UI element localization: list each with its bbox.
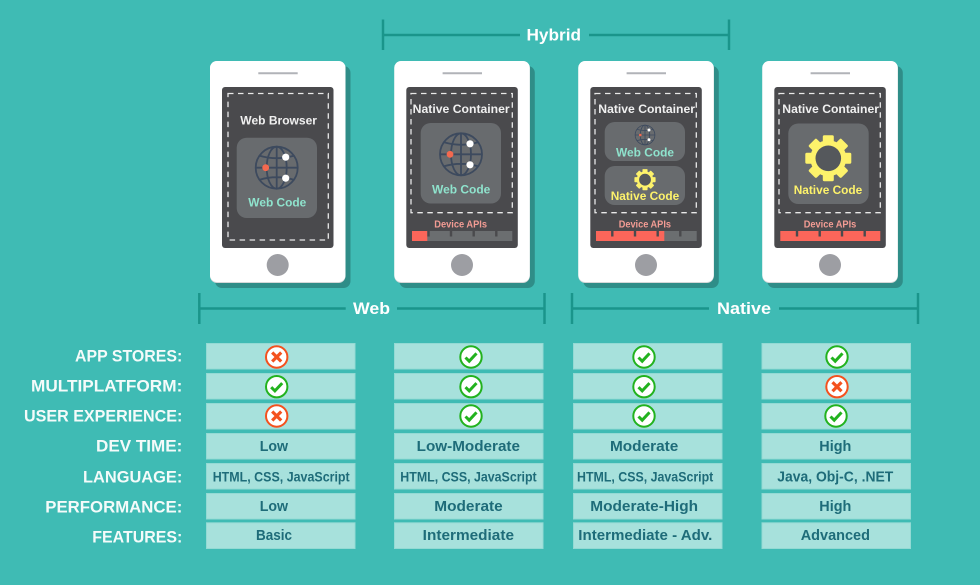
web code label: Web Code: [432, 182, 491, 196]
row: app stores: APP STORES:: [75, 347, 182, 366]
icon: gear: [805, 135, 851, 181]
row: language: Java, Obj-C, .NET: [777, 468, 893, 486]
row: dev time: [96, 434, 910, 459]
device APIs label: Device APIs: [434, 218, 487, 230]
device APIs label: Device APIs: [619, 218, 671, 230]
web code card: [605, 122, 685, 161]
dashed container: [411, 94, 512, 213]
icon: globe: [256, 147, 298, 189]
bracket: Native: Native: [717, 299, 771, 318]
row: performance: Moderate-High: [590, 498, 698, 515]
row: dev time: High: [819, 438, 851, 455]
row: user experience: USER EXPERIENCE:: [24, 407, 182, 426]
bracket: Web: [199, 293, 545, 324]
phone: Hybrid web code: [394, 61, 535, 288]
web code label: Web Code: [248, 196, 307, 210]
row: dev time: DEV TIME:: [96, 437, 182, 456]
dashed container: [595, 94, 696, 213]
row: performance: PERFORMANCE:: [45, 498, 182, 517]
phone: Hybrid web and native code: [578, 61, 719, 288]
row: performance: [45, 494, 911, 519]
row: language: HTML, CSS, JavaScript: [577, 470, 714, 484]
row: dev time: Moderate: [610, 438, 678, 455]
bracket: Hybrid: [383, 20, 729, 50]
row: app stores: [75, 344, 910, 369]
row: multiplatform: MULTIPLATFORM:: [31, 377, 182, 396]
row: language: HTML, CSS, JavaScript: [213, 470, 350, 484]
web code card: [421, 123, 501, 204]
row: features: Intermediate - Adv.: [578, 527, 712, 544]
container label: Native Container: [413, 102, 510, 116]
native code label: Native Code: [611, 189, 680, 203]
device API bar: [596, 231, 697, 241]
row: features: Basic: [256, 527, 292, 544]
row: performance: Moderate: [434, 498, 503, 515]
row: multiplatform: [31, 374, 910, 399]
icon: globe: [440, 133, 482, 175]
row: language: LANGUAGE:: [83, 468, 182, 487]
row: language: HTML, CSS, JavaScript: [400, 470, 537, 484]
phone: Web Browser: [210, 61, 350, 288]
container label: Web Browser: [240, 114, 317, 128]
device API bar: [412, 231, 512, 241]
bracket: Hybrid: Hybrid: [526, 26, 581, 44]
phone: Native: [762, 61, 903, 288]
bracket: Native: [572, 293, 918, 324]
bracket: Web: Web: [353, 299, 390, 318]
icon: small gear: [634, 169, 656, 190]
row: features: Advanced: [801, 527, 870, 544]
row: features: [92, 523, 911, 548]
icon: small globe: [635, 125, 655, 145]
row: features: FEATURES:: [92, 528, 182, 547]
container label: Native Container: [782, 102, 879, 116]
device API bar: [780, 231, 880, 241]
dashed container: [228, 94, 328, 240]
row: performance: High: [819, 498, 851, 515]
container label: Native Container: [598, 102, 695, 116]
row: language: [83, 464, 910, 489]
native code card: [788, 124, 869, 204]
web code card: [237, 138, 317, 218]
row: features: Intermediate: [423, 527, 514, 544]
native code card: [605, 166, 685, 205]
row: user experience: [24, 404, 910, 429]
dashed container: [779, 94, 880, 213]
comparison table: [24, 344, 910, 548]
row: dev time: Low: [260, 438, 288, 455]
row: dev time: Low-Moderate: [417, 438, 520, 455]
native code label: Native Code: [794, 183, 863, 197]
web code label: Web Code: [616, 146, 674, 160]
row: performance: Low: [260, 498, 288, 515]
device APIs label: Device APIs: [804, 218, 856, 230]
